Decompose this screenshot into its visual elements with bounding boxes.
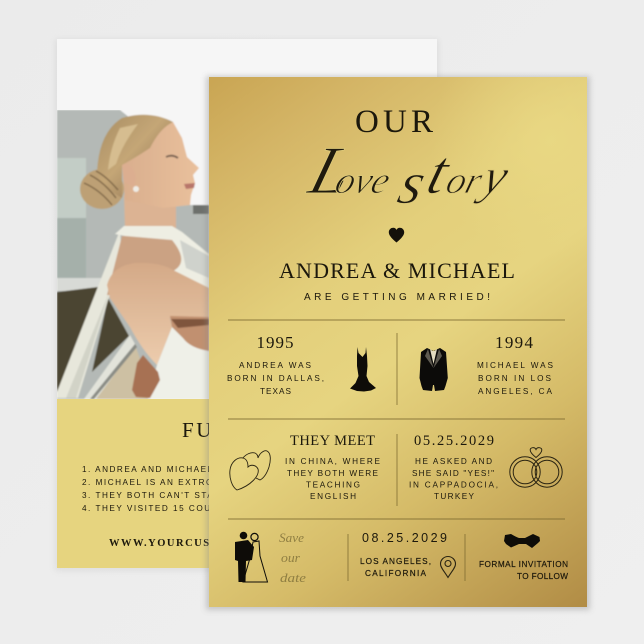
description: BORN IN LOS: [478, 374, 552, 383]
text block: facts list: [82, 465, 290, 513]
panel: back card gold footer: [57, 399, 437, 568]
bun: [80, 169, 124, 209]
text block: facts list: 4. THEY VISITED 15 COUNTRIES: [82, 504, 251, 513]
script: save our date: Save: [279, 530, 304, 545]
year: 1994: [495, 333, 534, 352]
description: THEY BOTH WERE: [287, 469, 379, 478]
description: IN CAPPADOCIA,: [409, 480, 498, 490]
year: 1995: [256, 333, 294, 352]
forearm: [170, 316, 209, 351]
icon: bride and groom: [235, 532, 268, 582]
location: [360, 557, 431, 578]
description: ANGELES, CA: [478, 387, 553, 396]
text: TO FOLLOW: [517, 572, 568, 581]
back skin: [106, 236, 182, 296]
script: save our date: [279, 530, 306, 585]
panel: front gold card: [206, 76, 590, 610]
hair: [97, 115, 173, 198]
panel: formal invitation: [479, 534, 568, 581]
title: love story script: L: [301, 133, 361, 209]
subheading: ARE GETTING MARRIED!: [304, 292, 490, 303]
photo: bride in profile: [57, 110, 209, 399]
description: [285, 457, 381, 501]
panel: wedding date and place: [360, 531, 456, 578]
text: FORMAL INVITATION: [479, 560, 568, 569]
text block: facts list: 3. THEY BOTH CAN'T STAND: [82, 491, 229, 500]
dividers: [228, 320, 565, 581]
title: love story script: y: [472, 150, 515, 205]
panel: save the date: [235, 530, 306, 585]
ear: [122, 164, 136, 187]
location: LOS ANGELES,: [360, 557, 431, 566]
text block: facts list: 1. ANDREA AND MICHAEL MET IN CHINA: [82, 465, 290, 474]
description: HE ASKED AND: [415, 457, 492, 466]
icon: map pin: [440, 557, 456, 578]
icon: rings: [510, 448, 562, 487]
title: love story script: or: [441, 160, 488, 202]
description: BORN IN DALLAS,: [227, 374, 324, 383]
neck: [124, 195, 176, 228]
description: [227, 361, 324, 396]
description: TURKEY: [434, 492, 475, 501]
text block: website: WWW.YOURCUSTOMSITE.COM: [109, 538, 304, 549]
icon: bow tie: [504, 534, 540, 548]
icon: dress: [350, 347, 376, 392]
description: IN CHINA, WHERE: [285, 457, 381, 466]
script: save our date: date: [280, 570, 306, 585]
hand: [132, 355, 160, 398]
heading: fun facts: FUN FACTS: [182, 418, 316, 442]
heading: THEY MEET: [290, 433, 375, 449]
description: MICHAEL WAS: [477, 361, 554, 370]
description: SHE SAID "YES!": [412, 469, 494, 478]
description: [409, 457, 498, 501]
heading: couple names: ANDREA & MICHAEL: [279, 258, 515, 283]
text: [479, 560, 568, 581]
title: our: OUR: [355, 104, 433, 140]
title: love story script: ove: [330, 160, 395, 202]
halter: [115, 226, 209, 288]
description: [477, 361, 554, 396]
date: 08.25.2029: [362, 531, 447, 545]
description: TEXAS: [260, 387, 292, 396]
panel: they meet: [230, 433, 381, 501]
description: ANDREA WAS: [239, 361, 312, 370]
text block: facts list: 2. MICHAEL IS AN EXTROVERT: [82, 478, 242, 487]
panel: michael birth: [420, 333, 554, 396]
location: CALIFORNIA: [365, 569, 427, 578]
icon: heart: [389, 228, 404, 242]
panel: andrea birth: [227, 333, 376, 396]
date: 05.25.2029: [414, 433, 494, 449]
panel: back card: [55, 39, 439, 571]
arm: [107, 263, 209, 365]
script: save our date: our: [281, 550, 301, 565]
icon: two hearts: [230, 451, 270, 490]
title: love story script: [298, 133, 520, 217]
description: TEACHING: [306, 480, 360, 490]
face: [122, 122, 199, 208]
title: love story script: s: [391, 150, 434, 217]
description: ENGLISH: [310, 492, 356, 501]
title: love story script: t: [420, 138, 458, 207]
dress: [148, 327, 209, 399]
icon: tuxedo: [420, 348, 448, 391]
panel: proposal: [409, 433, 562, 501]
